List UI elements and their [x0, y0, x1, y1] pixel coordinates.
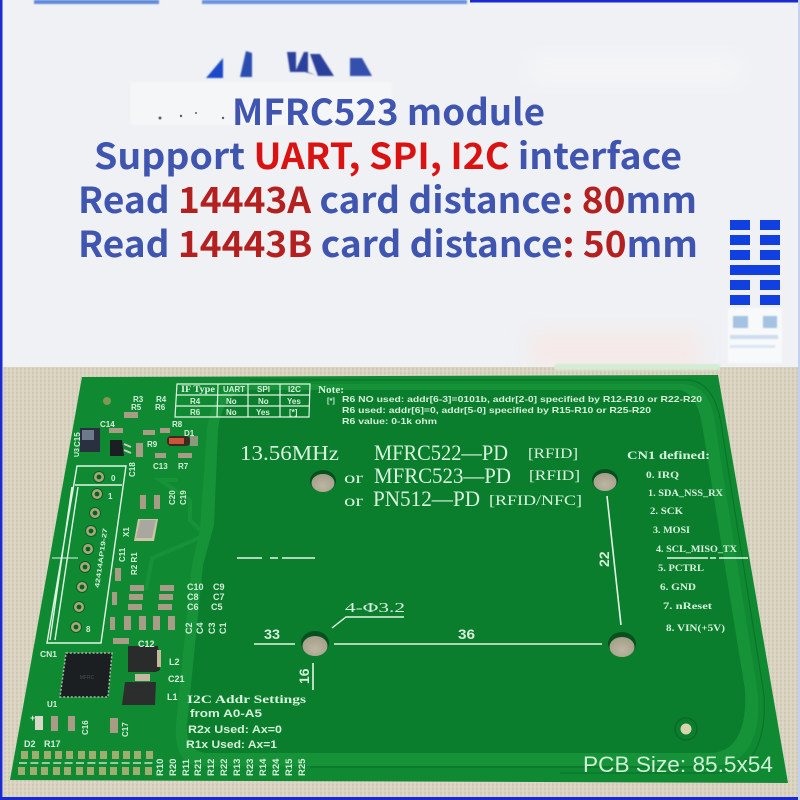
- resistor address labels: R21: [193, 758, 204, 776]
- chip compatibility text: PN512—PD: [373, 486, 480, 511]
- chip compatibility text: MFRC522—PD: [374, 440, 508, 465]
- component reference labels: R6: [155, 403, 166, 412]
- diode D1: [167, 429, 198, 446]
- chip compatibility text: [240, 440, 582, 511]
- dimension: 16: [296, 663, 313, 690]
- IF type table: I2C: [288, 385, 301, 394]
- line 4: 14443B distance: Read 14443B card distance: 50mm: [78, 216, 698, 268]
- mounting hole: bottom right: [608, 632, 636, 657]
- I2C address settings: R1x Used: Ax=1: [186, 739, 277, 751]
- mounting hole: bottom left: [301, 631, 329, 656]
- component reference labels: C4: [195, 622, 205, 634]
- line 3: 14443A distance: Read 14443A card distance: 80mm: [78, 172, 697, 224]
- crystal X1: X1: [122, 527, 131, 537]
- resistor address labels: R12: [206, 759, 217, 776]
- component reference labels: C18: [128, 462, 137, 477]
- IF type table: [*]: [289, 408, 298, 417]
- CN1 pin definitions: 5. PCTRL: [658, 563, 704, 573]
- resistor address labels: [155, 758, 308, 776]
- component reference labels: R5: [131, 403, 142, 412]
- I2C address settings: from A0-A5: [190, 708, 262, 720]
- CN1 pin definitions: 8. VIN(+5V): [666, 623, 725, 633]
- voltage regulator U3 area: U3: [74, 448, 81, 457]
- component reference labels: C7: [213, 592, 225, 602]
- IF type table: No: [226, 408, 237, 417]
- connector CN1: 8: [86, 625, 91, 634]
- faded text remnant below icon: [730, 316, 778, 348]
- component reference labels: C8: [187, 592, 199, 602]
- note block: R6 NO used: addr[6-3]=0101b, addr[2-0] specified by R12-R10 or R22-R20: [342, 394, 702, 404]
- CN1 pin definitions: 1. SDA_NSS_RX: [648, 488, 724, 498]
- component reference labels: C12: [138, 639, 155, 649]
- component reference labels: +: [30, 713, 35, 723]
- leftover blue smudges at top: [34, 0, 467, 78]
- dark antenna gaps: [250, 380, 764, 773]
- connector CN1: CN1: [40, 649, 57, 659]
- resistor address labels: R20: [168, 759, 179, 776]
- CN1 pin definitions: CN1 defined:: [627, 448, 710, 462]
- connector CN1: 1: [108, 492, 113, 501]
- dimension: hole diameter: [332, 601, 405, 628]
- resistor address labels: R15: [284, 758, 295, 776]
- soft background blur patches: [530, 55, 782, 370]
- chip compatibility text: MFRC523—PD: [374, 463, 511, 488]
- QFN controller chip: MFRC: [80, 675, 95, 681]
- component reference labels: R8: [172, 420, 183, 429]
- headline text: [78, 84, 698, 268]
- IF type table: No: [258, 397, 269, 406]
- crystal X1: [122, 519, 158, 541]
- I2C address settings: R2x Used: Ax=0: [188, 724, 282, 736]
- cloth background: [3, 367, 798, 797]
- chip compatibility text: 13.56MHz: [240, 441, 339, 465]
- small passive components: [35, 412, 192, 733]
- icon: hexagram bars: [730, 220, 780, 305]
- small dark specks: [158, 112, 224, 120]
- resistor address labels: R14: [258, 758, 269, 776]
- IF type table: [175, 384, 310, 417]
- green bleed above board: [555, 364, 720, 370]
- I2C address settings: I2C Addr Settings: [187, 692, 306, 706]
- component reference labels: C17: [121, 722, 130, 737]
- component reference labels: R4: [156, 395, 167, 404]
- connector CN1: 0: [111, 474, 116, 483]
- CN1 pin definitions: 3. MOSI: [653, 525, 691, 535]
- dimension: 22: [596, 496, 621, 625]
- CN1 pin definitions: 0. IRQ: [646, 470, 679, 480]
- antenna track area: [176, 384, 758, 766]
- component reference labels: C19: [179, 490, 188, 505]
- CN1 pin definitions: 7. nReset: [663, 601, 712, 611]
- bottom address pads: [18, 751, 153, 775]
- component reference labels: R9: [147, 440, 158, 449]
- voltage regulator U3 area: C15: [73, 432, 82, 447]
- IF type table: No: [226, 397, 237, 406]
- white erased patch: [130, 82, 392, 125]
- inductor L1: L1: [167, 692, 178, 702]
- IF type table: SPI: [257, 385, 270, 394]
- inductor L1: C21: [168, 674, 185, 684]
- dimension: 36: 36: [458, 626, 475, 642]
- left antenna routing: [146, 480, 201, 590]
- inductor L1: [122, 674, 185, 705]
- note block: R6 used: addr[6]=0, addr[5-0] specified by R15-R10 or R25-R20: [342, 405, 651, 415]
- voltage regulator U3 area: [73, 428, 131, 457]
- component reference labels: C1: [218, 622, 228, 634]
- IF type table: R6: [190, 408, 201, 417]
- board body: [10, 375, 788, 783]
- inner copper pour: [187, 390, 745, 753]
- component reference labels: C3: [207, 622, 217, 634]
- IF type table: Yes: [287, 397, 301, 406]
- component reference labels: C20: [168, 490, 177, 505]
- component reference labels: C2: [184, 622, 194, 634]
- dimension: 33: [254, 626, 295, 644]
- line 2: interfaces: Support UART, SPI, I2C interface: [94, 128, 682, 180]
- resistor address labels: R22: [219, 759, 230, 776]
- I2C address settings: [186, 692, 306, 751]
- resistor address labels: R11: [181, 758, 192, 776]
- IF type table: UART: [223, 385, 245, 394]
- component reference labels: C5: [211, 602, 223, 612]
- CN1 pin definitions: [627, 448, 738, 633]
- component reference labels: C11: [118, 547, 127, 562]
- component reference labels: R2 R1: [130, 552, 139, 575]
- resistor address labels: R13: [232, 759, 243, 776]
- line 1: module name: MFRC523 module: [232, 84, 545, 136]
- resistor address labels: R23: [245, 759, 256, 776]
- component reference labels: C16: [81, 720, 90, 735]
- component reference labels: C14: [100, 420, 115, 429]
- note block: [*]: [327, 396, 335, 405]
- component reference labels: C10: [187, 582, 204, 592]
- connector CN1: 42414AP19-27: [94, 527, 109, 588]
- CN1 pin definitions: 4. SCL_MISO_TX: [656, 544, 738, 554]
- inductor L2: L2: [169, 657, 180, 667]
- component reference labels: [24, 395, 228, 749]
- chip compatibility text: [RFID]: [528, 446, 578, 462]
- resistor address labels: R25: [297, 758, 308, 776]
- note block: [318, 385, 702, 426]
- mounting hole: top right: [592, 469, 618, 491]
- dimension: 16: 16: [296, 668, 312, 684]
- chip compatibility text: or: [344, 470, 364, 487]
- component reference labels: C13: [153, 462, 168, 471]
- component reference labels: C9: [213, 582, 225, 592]
- PCB board: [10, 375, 788, 783]
- IF type table: IF Type: [181, 384, 215, 394]
- component reference labels: R17: [44, 739, 61, 749]
- QFN controller chip: U1: [47, 700, 58, 709]
- diode D1: D1: [184, 429, 195, 438]
- chip compatibility text: [RFID/NFC]: [489, 493, 582, 509]
- connector CN1: [40, 466, 126, 659]
- component reference labels: D2: [24, 739, 36, 749]
- inductor L2: [128, 646, 180, 672]
- CN1 pin definitions: 2. SCK: [650, 506, 683, 516]
- resistor address labels: R10: [155, 759, 166, 776]
- note block: R6 value: 0-1k ohm: [342, 416, 438, 426]
- CN1 pin definitions: 6. GND: [660, 582, 697, 592]
- resistor address labels: R24: [271, 758, 282, 776]
- chip compatibility text: [RFID]: [529, 468, 580, 484]
- component reference labels: R7: [178, 462, 189, 471]
- IF type table: Yes: [256, 408, 270, 417]
- dimension: hole diameter: 4-Φ3.2: [345, 601, 405, 616]
- component reference labels: C6: [187, 602, 199, 612]
- mounting hole: top left: [310, 470, 336, 492]
- QFN controller chip: [47, 653, 112, 709]
- fiducial marks: [103, 397, 697, 740]
- PCB size label: PCB Size: 85.5x54: [583, 752, 773, 777]
- component reference labels: R3: [133, 395, 144, 404]
- dimension: 22: 22: [596, 551, 612, 567]
- chip compatibility text: or: [344, 493, 364, 510]
- center mark dashes: [237, 557, 748, 559]
- IF type table: R4: [190, 397, 201, 406]
- note block: Note:: [318, 385, 344, 396]
- dimension: 33: 33: [264, 626, 280, 642]
